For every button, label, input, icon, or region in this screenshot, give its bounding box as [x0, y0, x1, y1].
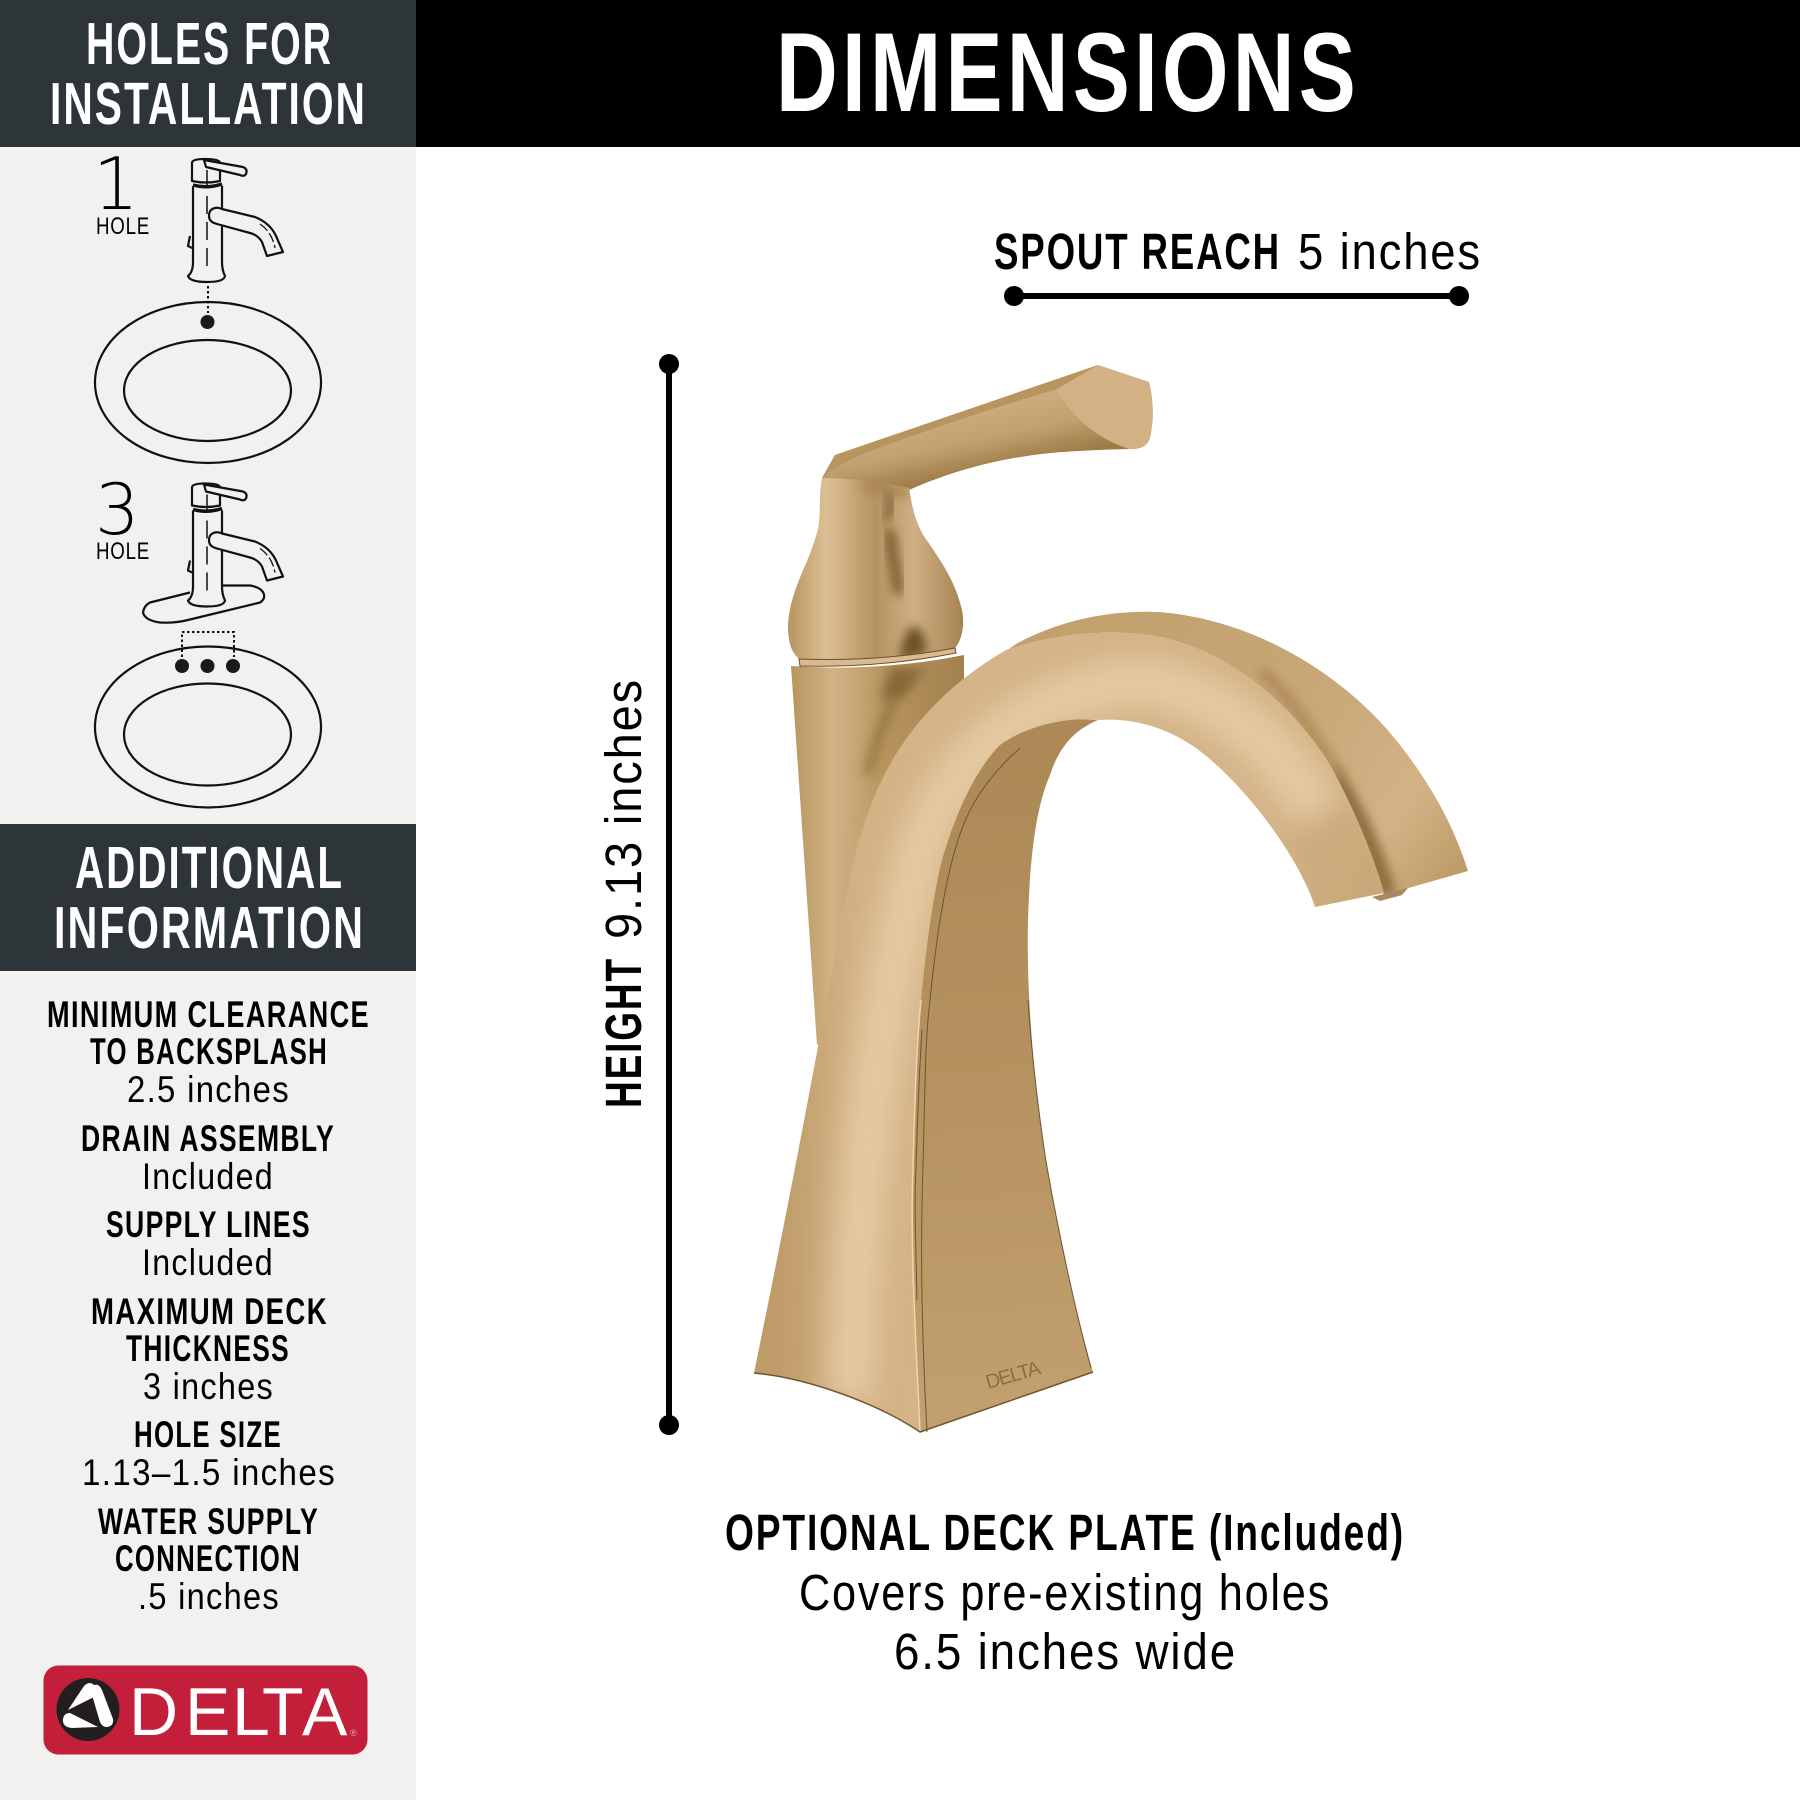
faucet spout top surface	[1006, 612, 1468, 894]
spec: drain assembly: Included	[142, 1156, 274, 1197]
spec: drain assembly	[81, 1118, 335, 1197]
heading: additional information	[0, 824, 416, 971]
spec: maximum deck thickness: THICKNESS	[126, 1328, 290, 1369]
faucet panel edges	[754, 748, 1093, 1432]
spec: water supply connection: CONNECTION	[115, 1538, 301, 1579]
heading: additional information: INFORMATION	[54, 895, 365, 961]
spec: minimum clearance	[47, 994, 370, 1110]
spec: maximum deck thickness: 3 inches	[143, 1366, 274, 1407]
text block: optional deck plate: 6.5 inches wide	[894, 1623, 1237, 1680]
spec: water supply connection: .5 inches	[138, 1576, 280, 1617]
dimension: height	[595, 354, 679, 1435]
label: 1 hole	[93, 142, 150, 240]
title banner: dimensions	[416, 0, 1800, 147]
label: 3 hole: HOLE	[96, 538, 150, 565]
logo: Delta: DELTA	[129, 1674, 348, 1750]
heading: holes for installation	[0, 0, 416, 147]
dimension: spout reach: SPOUT REACH	[994, 223, 1281, 280]
spec: hole size: 1.13–1.5 inches	[82, 1452, 336, 1493]
faucet engraved logo: DELTA	[983, 1357, 1044, 1394]
spec: minimum clearance: TO BACKSPLASH	[90, 1031, 328, 1072]
faucet ring	[799, 648, 956, 666]
heading: additional information: ADDITIONAL	[75, 835, 344, 901]
product image: gold faucet	[740, 365, 1480, 1450]
faucet handle	[822, 365, 1153, 505]
logo: Delta	[44, 1666, 368, 1754]
label: 3 hole	[95, 469, 150, 565]
faucet spout aerator	[1372, 888, 1408, 901]
text block: optional deck plate	[725, 1504, 1405, 1680]
spec: minimum clearance: 2.5 inches	[127, 1069, 290, 1110]
spec: minimum clearance: MINIMUM CLEARANCE	[47, 994, 370, 1035]
panel: left sidebar	[0, 0, 416, 1800]
label: 1 hole: HOLE	[96, 213, 150, 240]
icon: three-hole faucet with deck plate	[143, 484, 283, 623]
dimension: spout reach	[994, 223, 1482, 306]
dimension: spout reach: 5 inches	[1298, 223, 1482, 280]
icon: single-hole sink	[95, 286, 321, 463]
label: 1 hole: 1	[93, 142, 139, 226]
icon: single-hole faucet	[188, 159, 283, 282]
spec: drain assembly: DRAIN ASSEMBLY	[81, 1118, 335, 1159]
faucet lower body behind spout	[791, 655, 964, 1045]
spec: supply lines	[106, 1204, 311, 1283]
text block: specifications list	[47, 994, 370, 1617]
text block: optional deck plate: OPTIONAL DECK PLATE (Included)	[725, 1504, 1405, 1561]
spec: hole size	[82, 1414, 336, 1493]
faucet neck	[788, 478, 964, 659]
text block: optional deck plate: Covers pre-existing holes	[799, 1564, 1331, 1621]
title banner: dimensions: DIMENSIONS	[776, 10, 1360, 135]
spec: hole size: HOLE SIZE	[134, 1414, 282, 1455]
logo: Delta: ®	[350, 1728, 357, 1738]
spec: water supply connection	[98, 1501, 319, 1617]
heading: holes for installation: HOLES FOR	[86, 11, 333, 77]
spec: maximum deck thickness	[91, 1291, 328, 1407]
spec: supply lines: Included	[142, 1242, 274, 1283]
spec: water supply connection: WATER SUPPLY	[98, 1501, 319, 1542]
faucet front face and arch	[740, 620, 1400, 1450]
spec: maximum deck thickness: MAXIMUM DECK	[91, 1291, 328, 1332]
dimension: height: 9.13 inches	[595, 678, 652, 939]
dimension: height: HEIGHT	[595, 957, 652, 1108]
label: 3 hole: 3	[95, 469, 140, 551]
spec: supply lines: SUPPLY LINES	[106, 1204, 311, 1245]
faucet back panel	[900, 715, 1098, 1432]
icon: three-hole sink	[95, 632, 321, 808]
heading: holes for installation: INSTALLATION	[50, 71, 367, 137]
